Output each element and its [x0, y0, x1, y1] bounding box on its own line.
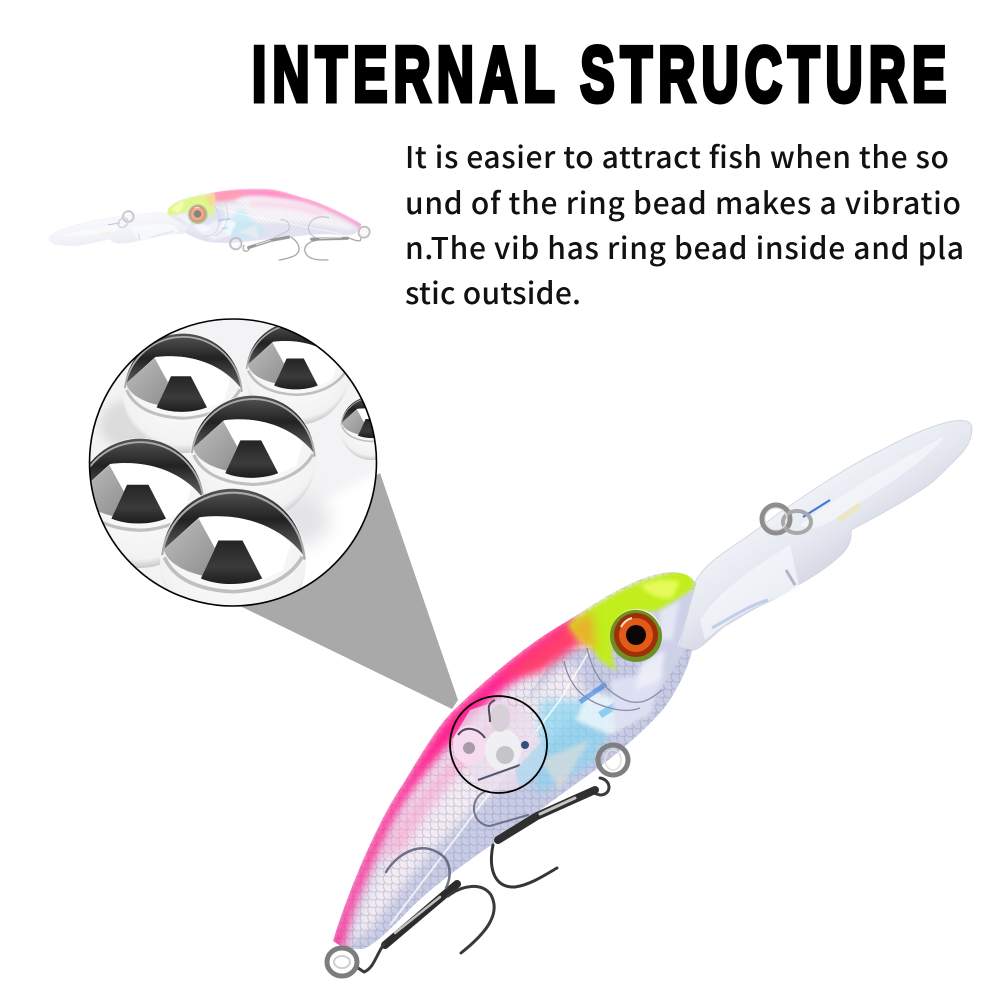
- description text: stic outside.: [405, 269, 581, 313]
- bead centre: [190, 395, 316, 521]
- bead top left: [123, 333, 243, 453]
- description text: [405, 133, 964, 313]
- description text: n.The vib has ring bead inside and pla: [405, 224, 964, 268]
- faded thumbnail lure: [48, 73, 374, 396]
- bead left: [90, 438, 204, 568]
- description text: It is easier to attract fish when the so: [405, 133, 949, 177]
- description text: und of the ring bead makes a vibratio: [405, 179, 961, 223]
- bead bottom: [160, 488, 306, 596]
- main lure: [320, 420, 972, 976]
- gray zoom cone: [240, 473, 458, 709]
- bead top right: [245, 321, 349, 425]
- magnified bead circle: [75, 318, 404, 634]
- title: INTERNAL STRUCTURE: [252, 31, 946, 119]
- bead far right: [340, 398, 376, 460]
- bead chamber detail and circle marker: [450, 696, 550, 793]
